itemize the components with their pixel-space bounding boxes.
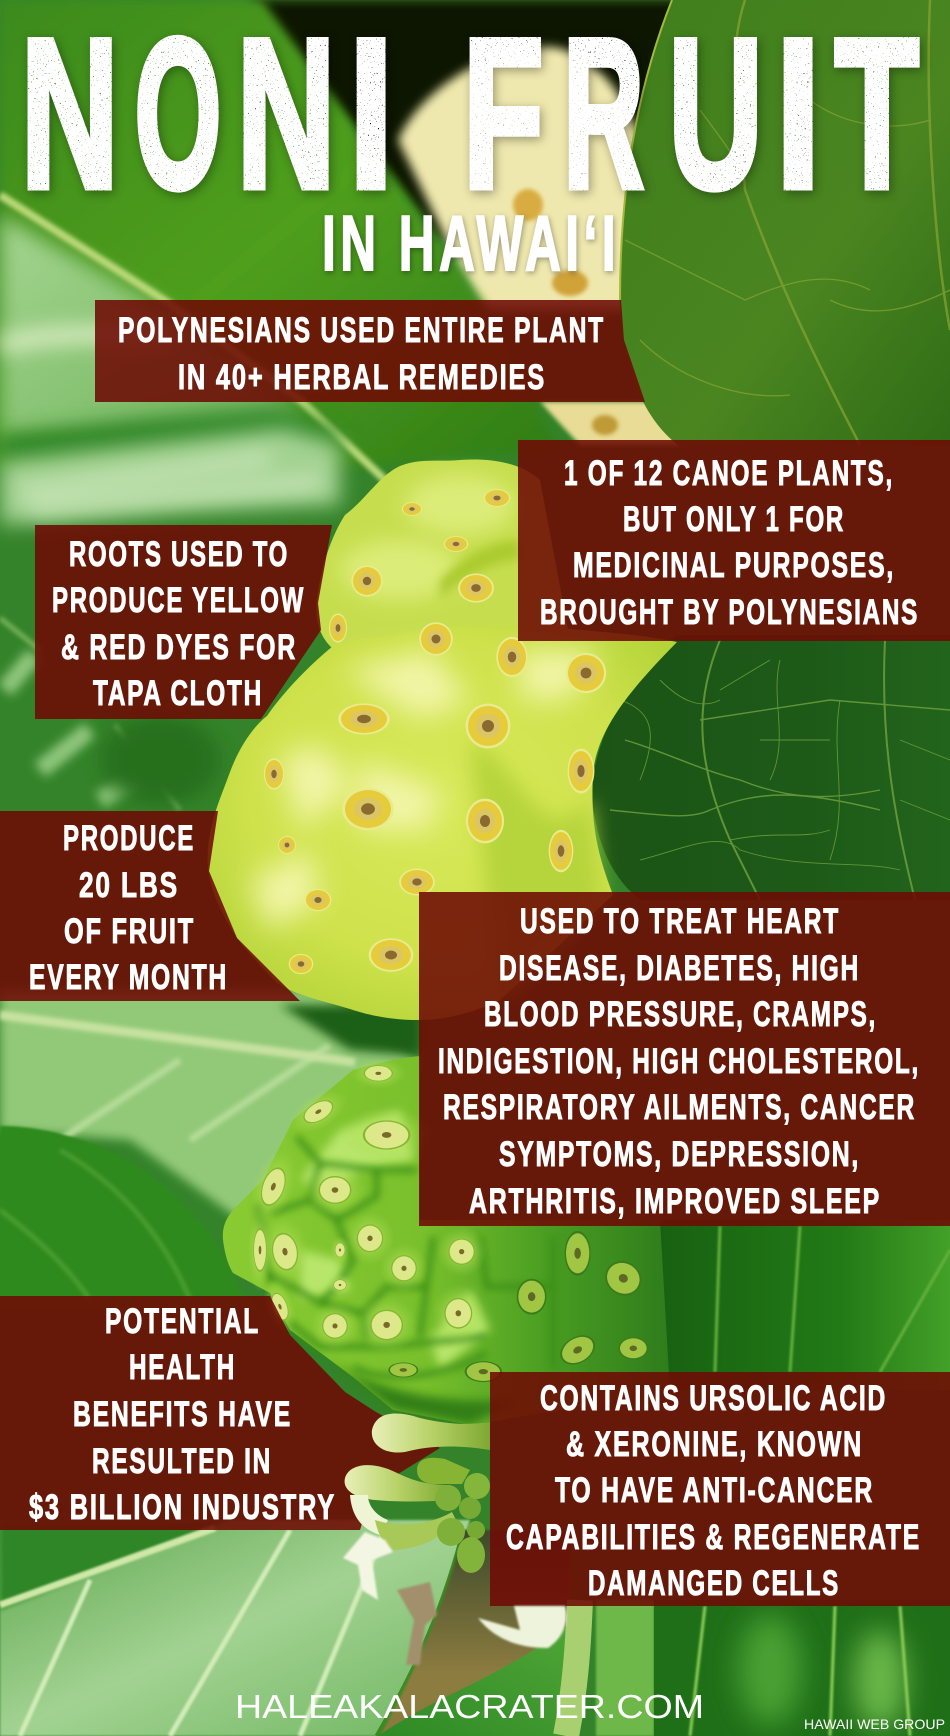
title: Noni Fruit: O xyxy=(134,0,222,233)
subtitle: in Hawai'i: IN HAWAI‘I xyxy=(322,199,620,287)
mid-left leaves xyxy=(0,428,340,810)
top-left leaf xyxy=(0,0,560,480)
panel: health benefits industry: RESULTED IN xyxy=(92,1441,272,1481)
lower-left pale leaf xyxy=(0,990,420,1220)
title: Noni Fruit: N xyxy=(237,0,336,233)
top-right large leaf xyxy=(620,0,950,445)
white noni flower xyxy=(478,1606,566,1648)
panel: roots and dyes: ROOTS USED TO xyxy=(69,534,289,574)
green-yellow noni fruit (large lower lobe) xyxy=(208,622,677,1020)
panel: health benefits industry: POTENTIAL xyxy=(105,1301,260,1341)
panel: health benefits industry xyxy=(0,1296,440,1530)
website footer: HALEAKALACRATER.COM xyxy=(235,1688,704,1725)
panel: health benefits industry: HEALTH xyxy=(129,1347,236,1387)
panel: active compounds xyxy=(490,1372,950,1606)
title: Noni Fruit xyxy=(21,0,919,233)
panel: Polynesian herbal remedies xyxy=(95,300,645,402)
panel: Polynesian herbal remedies: POLYNESIANS USED ENTIRE PLANT xyxy=(118,310,605,350)
title: Noni Fruit: R xyxy=(563,0,644,233)
noni flower buds xyxy=(343,1414,490,1665)
panel: canoe plants: BUT ONLY 1 FOR xyxy=(623,499,845,539)
panel: fruit production xyxy=(0,811,300,1001)
lower-left large leaf xyxy=(0,1520,470,1736)
lower centre leaf and stem xyxy=(378,1600,654,1736)
dark background behind top fruit xyxy=(250,0,690,240)
credit: HAWAII WEB GROUP xyxy=(804,1716,945,1732)
panel: active compounds: DAMANGED CELLS xyxy=(588,1563,840,1603)
title: Noni Fruit: U xyxy=(668,0,763,233)
panel: fruit production: OF FRUIT xyxy=(64,911,195,951)
dark green left leaf xyxy=(0,1126,262,1310)
panel: fruit production: PRODUCE xyxy=(63,818,195,858)
title: Noni Fruit: F xyxy=(463,0,544,233)
dark veined leaf beside fruit xyxy=(592,635,950,900)
panel: roots and dyes xyxy=(35,525,332,719)
panel: roots and dyes: & RED DYES FOR xyxy=(61,627,297,667)
panel: roots and dyes: PRODUCE YELLOW xyxy=(52,580,305,620)
panel: treated ailments xyxy=(419,892,950,1226)
olive gap between leaves xyxy=(380,1530,570,1736)
title: Noni Fruit: I xyxy=(348,0,394,233)
unripe green noni fruit xyxy=(223,1056,670,1425)
panel: Polynesian herbal remedies: IN 40+ HERBAL REMEDIES xyxy=(178,357,546,397)
bottom-right dark leaf xyxy=(654,1600,950,1736)
green-yellow noni fruit (upper lobe) xyxy=(316,460,570,652)
panel: health benefits industry: $3 BILLION INDUSTRY xyxy=(29,1487,336,1527)
panel: health benefits industry: BENEFITS HAVE xyxy=(73,1394,292,1434)
title: Noni Fruit: N xyxy=(21,0,119,233)
panel: roots and dyes: TAPA CLOTH xyxy=(93,673,263,713)
panel: fruit production: 20 LBS xyxy=(79,865,179,905)
title: Noni Fruit: I xyxy=(775,0,821,233)
pale ripe noni fruit at top xyxy=(398,47,680,445)
right leaf behind green fruit xyxy=(640,1220,950,1390)
panel: fruit production: EVERY MONTH xyxy=(29,957,228,997)
panel: canoe plants xyxy=(518,440,950,641)
